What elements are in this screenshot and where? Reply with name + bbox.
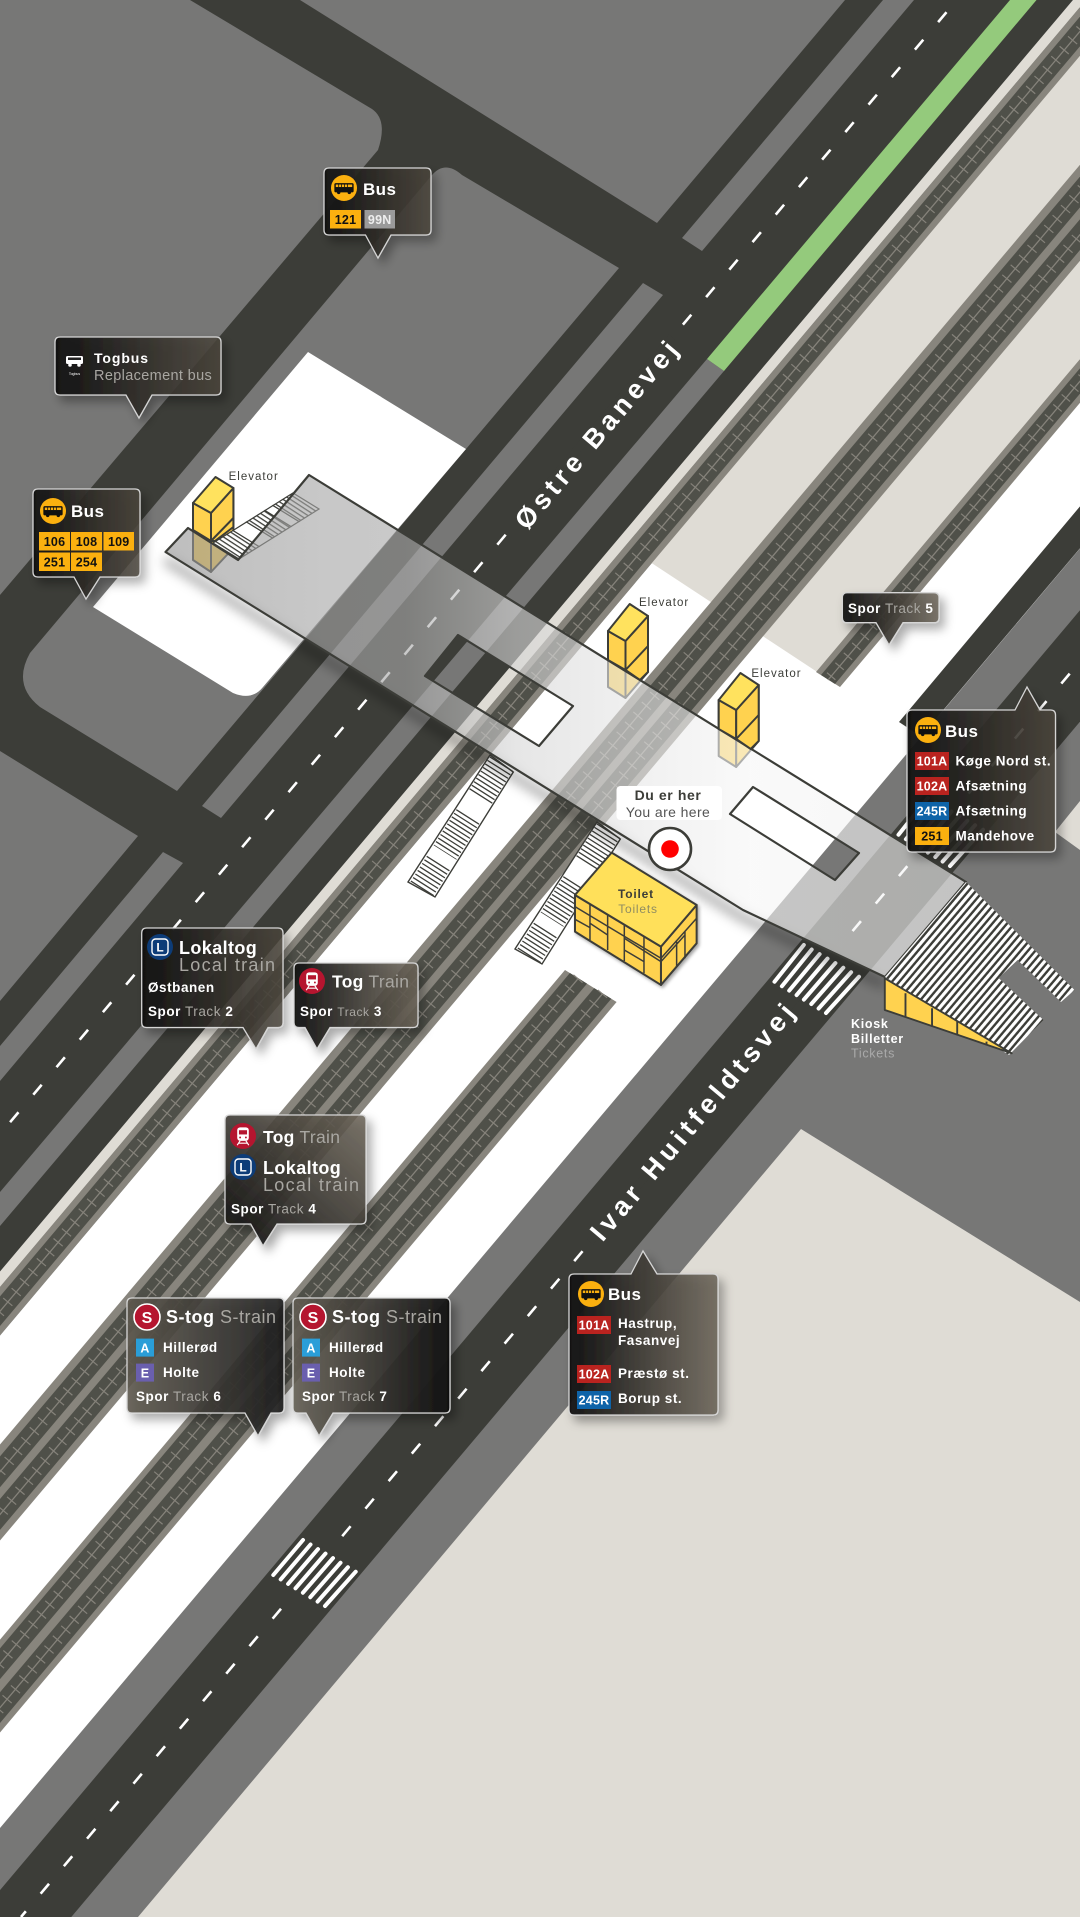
elevator 3 upper part — [719, 673, 759, 749]
callout: bus south: 102A — [579, 1368, 609, 1382]
kiosk — [885, 978, 1012, 1053]
icon: bus — [40, 498, 66, 524]
callout: bus west — [33, 489, 140, 599]
callout: local train track 2: Local train — [179, 955, 276, 975]
icon: S-train — [300, 1304, 326, 1330]
label: kiosk and tickets: Billetter — [851, 1032, 904, 1046]
callout: train track 3: Tog Train — [332, 972, 409, 992]
callout: bus east: 251 — [921, 830, 943, 844]
callout: bus west: 254 — [76, 556, 97, 570]
track: Spor 5 — [816, 0, 1080, 687]
callout: bus east: Køge Nord st. — [956, 754, 1051, 768]
lane: lower median — [0, 852, 183, 1081]
callout: S-train track 6: Hillerød — [163, 1340, 218, 1355]
icon: local train — [230, 1154, 256, 1180]
label: toilets: Toilet — [618, 887, 654, 901]
zebra crossing: lower road — [268, 1535, 360, 1611]
callout: local train track 2: Østbanen — [148, 980, 215, 995]
callout: bus east: Mandehove — [956, 828, 1035, 844]
zebra crossing: near kiosk — [771, 942, 861, 1016]
road name: Ivar Huitfeldtsvej: Ivar Huitfeldtsvej — [584, 998, 801, 1247]
callout: S-train track 6: S-tog S-train — [166, 1307, 277, 1327]
label: elevator centre: Elevator — [639, 597, 689, 609]
callout: bus east: 101A — [917, 754, 947, 768]
elevator 2 upper part — [608, 604, 648, 680]
icon: train — [299, 968, 325, 994]
icon: S-train — [134, 1304, 160, 1330]
platform white panel left — [93, 352, 466, 696]
callout: replacement bus: Togbus — [94, 350, 149, 366]
callout: S-train track 7: S-tog S-train — [332, 1307, 443, 1327]
callout: train and local train track 4: Lokaltog — [263, 1158, 341, 1178]
callout: S-train track 6 — [127, 1298, 284, 1436]
label: elevator west: Elevator — [229, 471, 279, 483]
callout: train track 3: Spor Track 3 — [300, 1004, 382, 1019]
callout: local train track 2: Lokaltog — [179, 938, 257, 958]
footbridge deck — [166, 475, 966, 977]
callout: S-train track 6: Spor Track 6 — [136, 1389, 221, 1404]
stairs: footbridge west — [213, 493, 319, 559]
elevator 1 lower part — [193, 488, 233, 572]
cream upper area — [647, 0, 1080, 687]
label: kiosk and tickets: Tickets — [851, 1046, 895, 1060]
callout: bus south: 101A — [579, 1318, 609, 1332]
callout: bus south: Borup st. — [618, 1391, 682, 1406]
toilet building — [575, 853, 697, 985]
callout: train and local train track 4: Spor Track 4 — [231, 1202, 316, 1216]
cream triangle right — [1055, 801, 1080, 850]
callout: train and local train track 4 — [225, 1115, 366, 1246]
icon: local train — [147, 934, 173, 960]
icon: train — [230, 1123, 256, 1149]
block: top left — [0, 0, 382, 595]
callout: bus west: 109 — [108, 535, 129, 549]
icon: togbus: Togbus — [69, 372, 80, 376]
callout: S-train track 7: Spor Track 7 — [302, 1389, 387, 1404]
callout: track 5 — [842, 593, 939, 645]
you are here marker — [649, 828, 691, 870]
callout: bus north: Bus — [363, 180, 396, 199]
cream lower right area — [138, 1129, 1080, 1917]
callout: bus east: Afsætning — [956, 778, 1027, 794]
callout: bus north: 99N — [368, 213, 391, 227]
parking lane dark — [899, 0, 1080, 736]
lane: middle median — [202, 283, 663, 818]
callout: S-train track 7: E — [307, 1366, 315, 1380]
you are here label: Du er her — [635, 787, 701, 803]
callout: S-train track 7 — [293, 1298, 450, 1436]
callout: bus north — [324, 168, 431, 258]
callout: bus south: Hastrup, — [618, 1316, 677, 1331]
block: lower left — [0, 751, 138, 1001]
callout: S-train track 7: A — [306, 1342, 316, 1356]
callout: S-train track 7: Holte — [329, 1365, 366, 1380]
road patch behind Østre Banevej name — [517, 337, 672, 521]
footbridge shadow — [165, 560, 885, 985]
lane: lower right median — [0, 359, 724, 1226]
icon: bus — [915, 717, 941, 743]
callout: bus east — [907, 687, 1056, 852]
callout: local train track 2: Spor Track 2 — [148, 1004, 233, 1019]
block: lower — [23, 168, 619, 791]
label: elevator east: Elevator — [751, 668, 802, 680]
callout: bus east: 245R — [917, 804, 947, 818]
callout: replacement bus — [55, 337, 221, 418]
you are here label — [616, 786, 722, 820]
callout: train track 3 — [294, 963, 418, 1049]
icon: local train: L — [239, 1160, 247, 1174]
elevator 2 lower part — [608, 616, 648, 698]
callout: bus west: 251 — [44, 556, 65, 570]
icon: S-train: S — [142, 1310, 153, 1327]
track: Spor 6 and 7 — [0, 970, 617, 1917]
label: toilets: Toilets — [618, 902, 658, 916]
cream kerb — [0, 0, 1080, 1287]
stairs: platform 2/3 — [408, 755, 513, 897]
callout: train and local train track 4: Tog Train — [263, 1127, 340, 1147]
stairs: platform 4/5 — [515, 822, 620, 964]
lane: green cycle strip — [707, 0, 1036, 371]
callout: train and local train track 4: Local train — [263, 1175, 360, 1195]
callout: track 5: Spor Track 5 — [848, 601, 933, 616]
you are here label: You are here — [626, 804, 710, 820]
block: top — [300, 0, 845, 223]
icon: S-train: S — [308, 1310, 319, 1327]
callout: S-train track 6: A — [140, 1342, 150, 1356]
callout: bus west: 108 — [76, 535, 97, 549]
callout: bus south: 245R — [579, 1394, 609, 1408]
callout: bus east: Afsætning — [956, 804, 1027, 818]
callout: replacement bus: Replacement bus — [94, 368, 212, 384]
callout: S-train track 7: Hillerød — [329, 1340, 384, 1355]
icon: togbus — [66, 356, 83, 376]
callout: bus north: 121 — [335, 213, 356, 227]
callout: bus west: Bus — [71, 502, 104, 521]
plaza stairs striped — [885, 882, 1074, 1055]
callout: bus east: 102A — [917, 780, 947, 794]
callout: bus west: 106 — [44, 535, 65, 549]
road patch behind Ivar Huitfeldtsvej name — [590, 940, 845, 1242]
callout: bus south: Bus — [608, 1285, 641, 1304]
lane: upper median — [682, 0, 914, 251]
callout: S-train track 6: Holte — [163, 1365, 200, 1380]
callout: bus south — [569, 1251, 718, 1415]
zebra crossing: behind bus panel — [895, 795, 985, 869]
callout: S-train track 6: E — [141, 1366, 149, 1380]
icon: local train: L — [156, 940, 164, 954]
callout: bus south: Præstø st. — [618, 1366, 690, 1381]
callout: bus south: Fasanvej — [618, 1333, 680, 1348]
road name: Østre Banevej: Østre Banevej — [509, 335, 684, 535]
icon: bus — [578, 1281, 604, 1307]
callout: bus east: Bus — [945, 722, 978, 741]
label: kiosk and tickets: Kiosk — [851, 1017, 889, 1031]
elevator 1 upper part — [193, 477, 233, 541]
Østre Banevej road area — [0, 0, 1073, 1272]
icon: bus — [331, 175, 357, 201]
centre dashes: Ivar Huitfeldtsvej — [21, 646, 1080, 1917]
elevator 3 lower part — [719, 685, 759, 767]
callout: local train track 2 — [142, 928, 283, 1049]
